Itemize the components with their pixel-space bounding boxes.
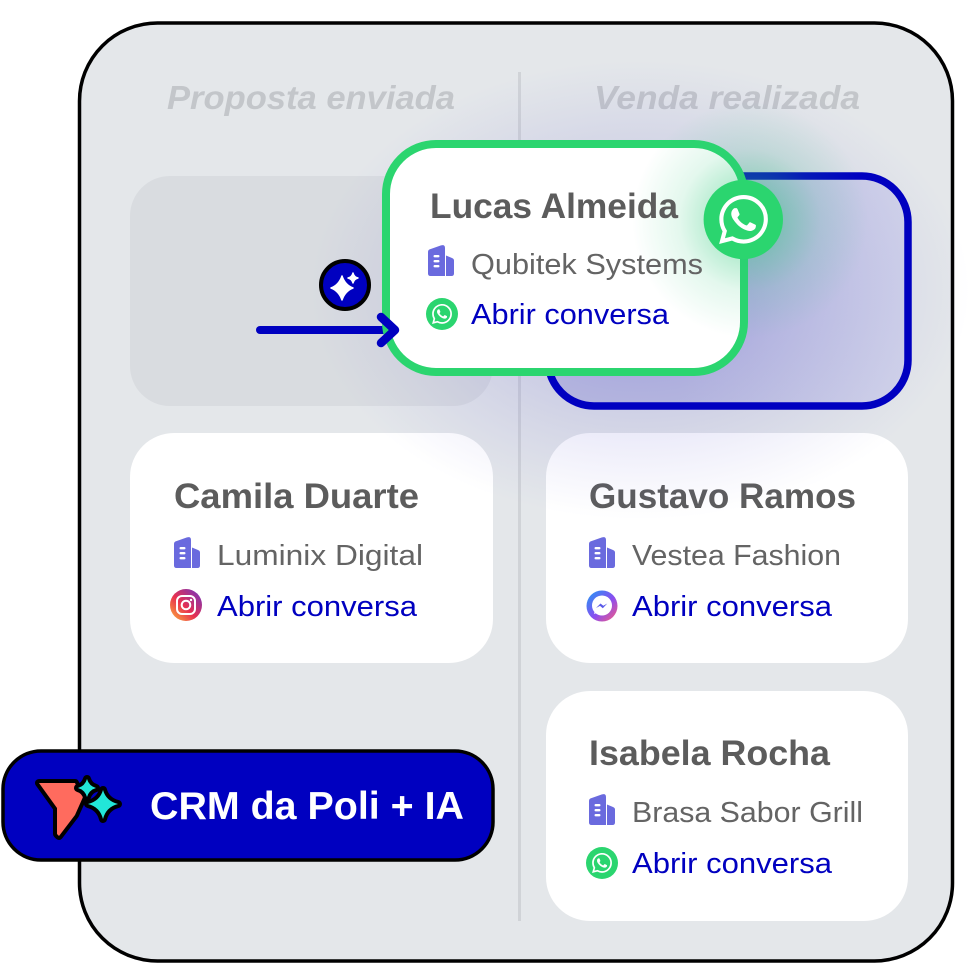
open conversation link: Abrir conversa [632,591,833,623]
column divider [518,72,521,921]
icon: WhatsApp small [586,847,618,879]
company: Vestea Fashion [632,540,841,572]
open conversation link: Abrir conversa [632,848,833,880]
icon: building [589,537,615,568]
card: Lucas Almeida content [426,187,703,331]
open conversation link: Abrir conversa [471,299,670,331]
arrow head [381,317,395,343]
target slot outline [548,176,908,406]
icon: building [174,537,200,568]
icon: WhatsApp small [426,298,458,330]
card: Lucas Almeida frame [386,144,744,372]
icon: AI sparkle badge [321,261,369,309]
icon: Instagram [170,589,202,621]
company: Luminix Digital [217,540,423,572]
company: Qubitek Systems [471,249,703,281]
icon: funnel with sparkles [39,779,118,836]
heading: Venda realizada: Venda realizada [594,79,860,116]
icon: building [589,794,615,825]
open conversation link: Abrir conversa [217,591,418,623]
contact name: Camila Duarte [174,477,419,516]
contact name: Isabela Rocha [589,734,831,773]
company: Brasa Sabor Grill [632,797,863,829]
icon: WhatsApp badge [704,180,783,259]
card: Isabela Rocha [546,691,908,921]
arrow line [260,326,392,334]
card: Gustavo Ramos [546,433,908,663]
icon: Messenger [586,590,618,622]
card: Camila Duarte [130,433,493,663]
purple glow [310,60,968,520]
heading: Proposta enviada: Proposta enviada [167,79,455,116]
badge: CRM da Poli + IA [3,751,493,860]
empty slot: origin [130,176,493,406]
contact name: Gustavo Ramos [589,477,856,516]
icon: building [428,245,454,276]
target slot fill [548,176,908,406]
green glow [632,102,868,338]
contact name: Lucas Almeida [430,187,679,226]
badge label: CRM da Poli + IA [150,785,464,828]
